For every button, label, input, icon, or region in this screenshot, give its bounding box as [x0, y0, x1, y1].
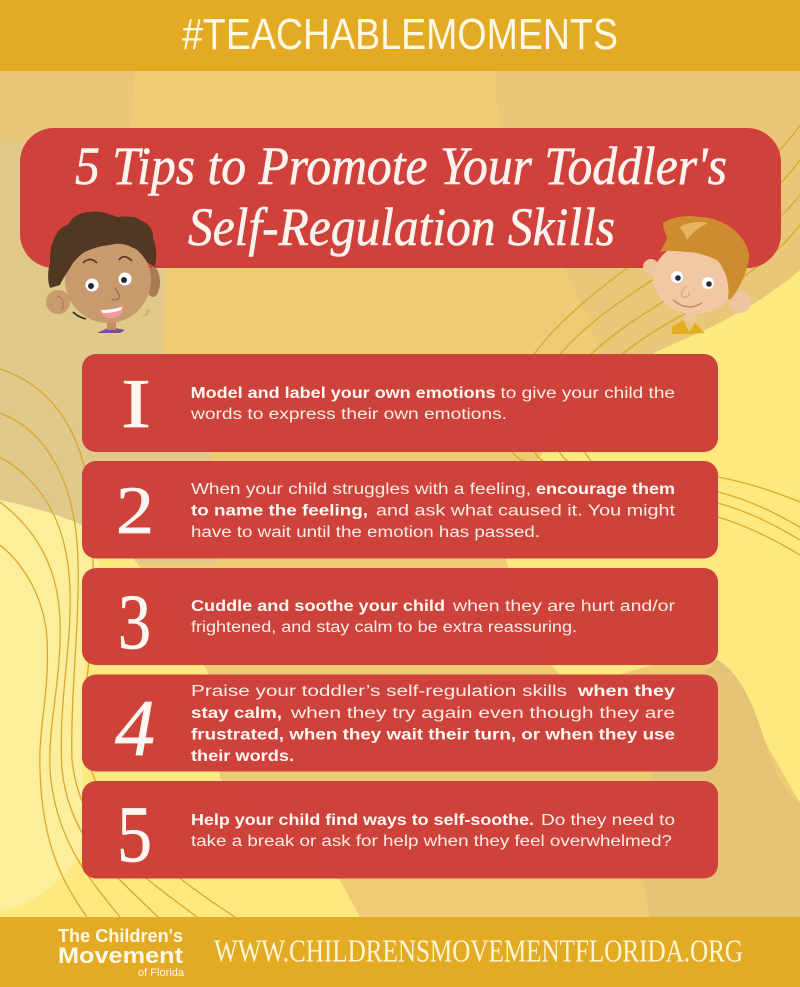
tip 4 text: their words. [191, 748, 294, 765]
number 1: I [121, 366, 151, 443]
eyes [86, 272, 132, 292]
tip 2 text: encourage them [536, 481, 675, 498]
number 5: 5 [117, 791, 152, 879]
tip 1 text: to give your child the [500, 385, 675, 402]
title line 2: Self-Regulation Skills [188, 197, 615, 257]
tip 2 text: When your child struggles with a feeling, [191, 481, 531, 498]
illustration: blond child [643, 216, 751, 334]
tip 4 text: Praise your toddler’s self-regulation skills [191, 683, 567, 700]
logo: The Children's Movement of Florida: The Children's [58, 926, 183, 946]
tip 1 text [190, 385, 675, 423]
tip 5 text: Help your child find ways to self-soothe. [191, 812, 534, 829]
tip 3 text [191, 598, 675, 636]
tip card 3 [82, 568, 718, 665]
tip 2 text: and ask what caused it. You might [376, 502, 676, 520]
tip 2 text: have to wait until the emotion has passed. [191, 524, 540, 541]
number 2: 2 [116, 472, 154, 548]
tip 5 text [191, 812, 675, 850]
tip card 2 [82, 461, 718, 558]
tip 4 text: frustrated, when they wait their turn, or when they use [191, 726, 676, 744]
tip 1 text: Model and label your own emotions [191, 385, 496, 402]
number 4: 4 [115, 685, 155, 773]
tip 2 text [191, 481, 676, 541]
tip 4 text: stay calm, [191, 705, 282, 722]
tip card 5 [82, 781, 718, 879]
footer band [0, 917, 800, 987]
tip 4 text: when they [577, 683, 676, 700]
decorative curved lines right [504, 125, 800, 555]
tip card 4 [82, 674, 718, 773]
number 3: 3 [118, 578, 151, 665]
decorative curved lines left [0, 369, 235, 917]
tip 5 text: Do they need to [541, 812, 675, 829]
tip 4 text [191, 683, 676, 765]
title banner [20, 128, 781, 268]
tip card 1 [82, 354, 718, 452]
logo: The Children's Movement of Florida: Movement [58, 943, 184, 968]
tip 1 text: words to express their own emotions. [190, 406, 507, 423]
tip 3 text: Cuddle and soothe your child [191, 598, 445, 615]
tip 2 text: to name the feeling, [191, 502, 368, 520]
hair [48, 211, 157, 288]
tip 3 text: when they are hurt and/or [452, 598, 675, 615]
tip 5 text: take a break or ask for help when they feel overwhelmed? [191, 833, 672, 850]
tip 3 text: frightened, and stay calm to be extra reassuring. [191, 619, 577, 636]
logo: The Children's Movement of Florida [58, 926, 185, 979]
title line 1: 5 Tips to Promote Your Toddler's [75, 136, 727, 196]
illustration: curly-haired child [46, 211, 160, 333]
tip 4 text: when they try again even though they are [290, 705, 675, 722]
header hashtag: #TEACHABLEMOMENTS [182, 10, 618, 59]
header band [0, 0, 800, 71]
logo: The Children's Movement of Florida: of Florida [138, 967, 185, 979]
